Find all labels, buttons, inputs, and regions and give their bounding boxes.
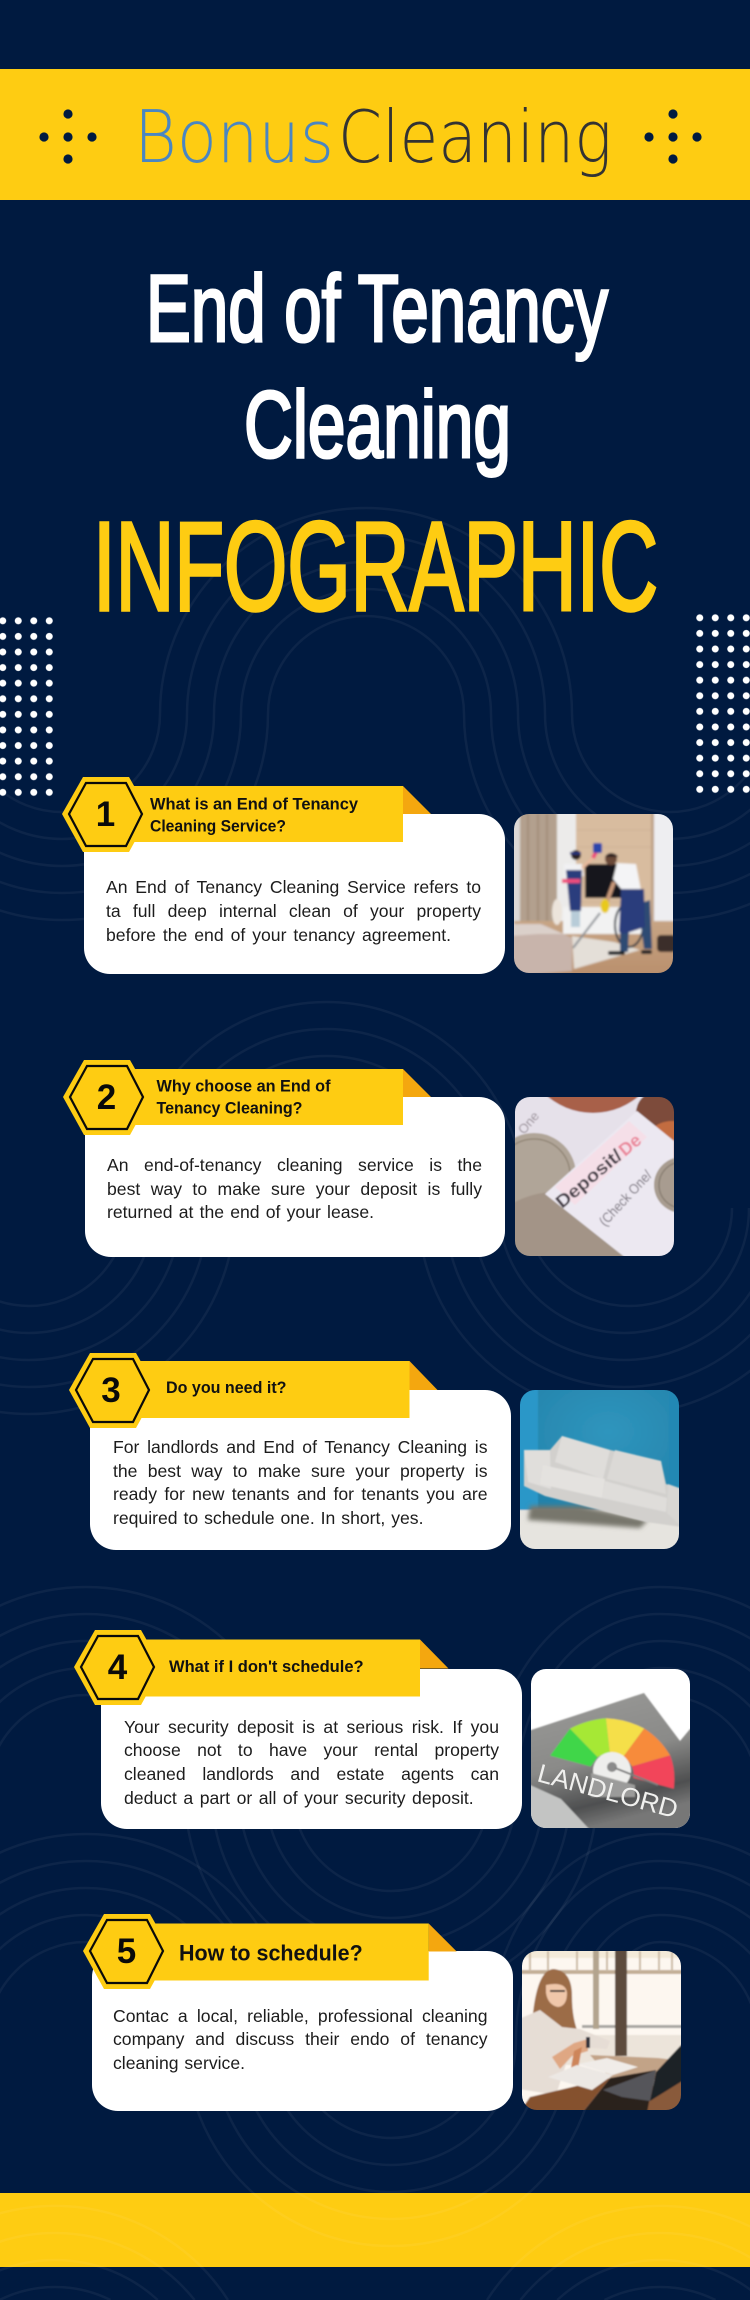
body text: company and discuss their endo of tenancy [113,2029,488,2049]
body text [113,1437,488,1528]
body text: best way to make sure your deposit is fully [107,1179,482,1199]
photo: deposit slip and coins: (Check One/ [595,1167,655,1229]
bottom band [0,2193,750,2267]
ribbon [108,1361,409,1418]
photo: deposit slip and coins: One [515,1108,542,1137]
photo: deposit slip and coins: Deposit/ [552,1145,626,1212]
panel: step 2 [63,1060,674,1257]
photo: deposit slip and coins: De [615,1130,645,1160]
body text: required to schedule one. In short, yes. [113,1508,424,1528]
ribbon heading: What if I don't schedule? [169,1658,364,1676]
ribbon fold [429,1923,457,1951]
body text: cleaned landlords and estate agents can [124,1764,499,1784]
hexagon number 2: 2 [97,1078,116,1117]
body text: An End of Tenancy Cleaning Service refers to [106,876,481,896]
logo word: Bonus: Bonus [134,95,334,179]
hexagon number 4: 4 [108,1648,128,1687]
body text: ta full deep internal clean of your property [106,900,481,920]
ribbon heading [150,796,359,836]
hexagon number 5: 5 [117,1932,136,1970]
body text: before the end of your tenancy agreement. [106,924,451,944]
header ribbon with number hexagon [69,1353,438,1428]
ribbon [114,1640,420,1696]
hexagon number 2 [63,1060,151,1135]
ribbon heading: Tenancy Cleaning? [156,1100,302,1118]
ribbon heading: What is an End of Tenancy [150,796,359,814]
text card [92,1951,513,2111]
header band [0,69,750,200]
photo: deposit slip and coins [515,1097,674,1256]
body text: the best way to make sure your property is [113,1461,488,1481]
body text [113,2006,488,2073]
body text [107,1155,482,1222]
hexagon number 3: 3 [101,1371,120,1410]
body text: Your security deposit is at serious risk. If you [124,1716,499,1736]
logo: BonusCleaning with dot ornaments [39,95,702,179]
right dot grid [692,610,750,797]
text card [85,1097,505,1257]
ribbon heading [156,1078,331,1118]
body text [106,876,481,944]
text card [101,1668,522,1828]
header ribbon with number hexagon [74,1630,448,1705]
panel: step 1 [62,777,673,974]
photo: white sofa against a blue wall [520,1390,679,1549]
icon: right dot cross [644,109,702,164]
hexagon number 3 [68,1353,156,1428]
ribbon heading: Why choose an End of [156,1078,331,1096]
header ribbon with number hexagon [83,1914,457,1989]
ribbon fold [409,1361,437,1390]
ribbon heading: Do you need it? [166,1379,286,1397]
body text: returned at the end of your lease. [107,1202,374,1222]
body text: choose not to have your rental property [124,1740,499,1760]
ribbon fold [403,786,431,814]
left dot grid [0,613,57,800]
title [93,256,658,630]
ribbon heading: Cleaning Service? [150,818,286,836]
body text: ready for new tenants and for tenants you are [113,1484,488,1504]
hexagon number 5 [83,1914,171,1988]
panel: step 3 [69,1353,679,1550]
photo: couple cleaning a living room [514,814,673,973]
ribbon fold [420,1640,448,1668]
icon: left dot cross [39,109,97,164]
body text: For landlords and End of Tenancy Cleaning is [113,1437,488,1457]
text card [90,1390,511,1550]
photo text: LANDLORD: LANDLORD [534,1757,681,1824]
ribbon heading: How to schedule? [179,1940,363,1965]
header ribbon with number hexagon [62,777,431,852]
ribbon [123,1923,429,1980]
body text: An end-of-tenancy cleaning service is the [107,1155,482,1175]
hexagon number 1: 1 [96,795,115,834]
ribbon fold [403,1069,431,1097]
header ribbon with number hexagon [63,1060,431,1135]
title line: Cleaning: Cleaning [244,372,511,478]
hexagon number 1 [62,777,150,852]
panel: step 5 [83,1914,681,2111]
panel: step 4 [74,1630,690,1829]
photo: landlord gauge on a house [531,1669,690,1828]
ribbon [103,1069,403,1125]
ribbon [102,786,403,842]
body text: cleaning service. [113,2053,245,2073]
body text [124,1716,499,1808]
hexagon number 4 [74,1630,162,1705]
text card [84,814,505,974]
body text: deduct a part or all of your security deposit. [124,1788,474,1808]
photo: woman checking her watch at a desk [522,1951,681,2110]
body text: Contac a local, reliable, professional cleaning [113,2006,488,2026]
logo word: Cleaning: Cleaning [338,95,612,179]
